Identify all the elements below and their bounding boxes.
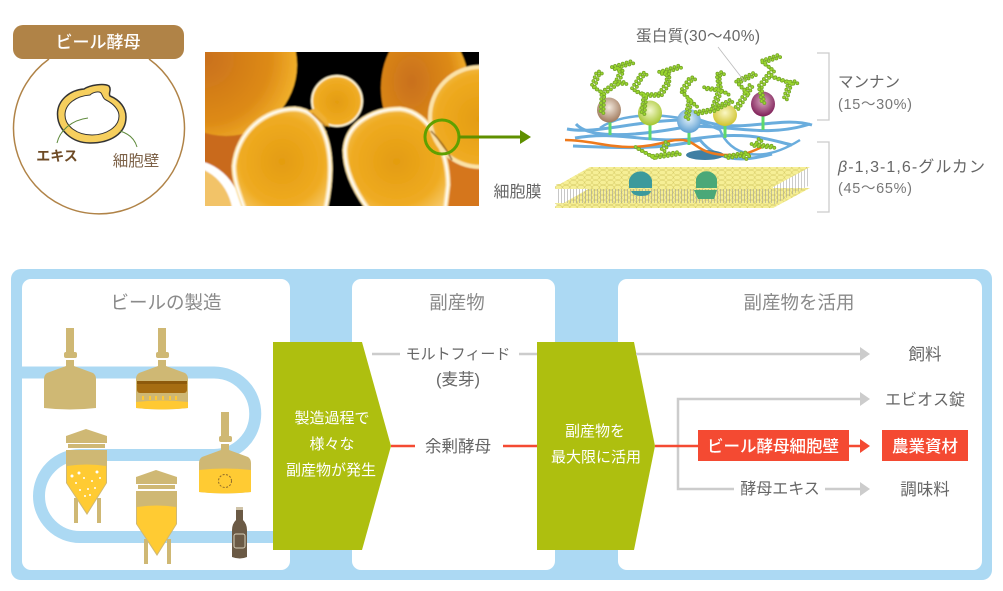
panel: brewing: [22, 279, 290, 570]
protein spheres: [597, 92, 775, 133]
label: エキス: エキス: [36, 148, 78, 164]
red box: 農業資材: [882, 430, 968, 461]
icon: kettle 3: [199, 412, 251, 494]
green arrow block 2: 副産物を: [565, 423, 625, 440]
protein sticks: [610, 115, 763, 145]
leader lines: [57, 118, 137, 147]
label: 調味料: 調味料: [900, 480, 950, 499]
label: モルトフィード (麦芽): (麦芽): [436, 370, 480, 389]
red box: 農業資材: 農業資材: [892, 437, 958, 456]
label: 細胞壁: 細胞壁: [113, 152, 159, 170]
label: glucan: [837, 158, 985, 197]
green arrow block 1: [273, 342, 391, 550]
green arrow block 1: 様々な: [309, 436, 355, 453]
orange strand and oval: [565, 140, 762, 160]
bracket: glucan: [817, 142, 829, 212]
brown badge: ビール酵母: [13, 25, 184, 59]
label: モルトフィード (麦芽): [406, 346, 510, 389]
label: glucan: (45～65%): [838, 181, 912, 197]
green arrow block 2: [537, 342, 655, 550]
label: 飼料: 飼料: [908, 345, 942, 364]
red box: ビール酵母細胞壁: [698, 430, 849, 461]
label: glucan: β-1,3-1,6-グルカン: [837, 158, 985, 176]
red box: ビール酵母細胞壁: ビール酵母細胞壁: [707, 437, 839, 456]
red line: surplus yeast: [391, 445, 540, 447]
panel: utilization: [618, 279, 982, 570]
icon: beer bottle: [232, 507, 247, 558]
mannan chains: [592, 54, 799, 162]
cell wall diagram: [493, 27, 812, 208]
icon: fermenter: [136, 470, 177, 564]
label: mannan: [838, 74, 912, 113]
label: mannan: マンナン: [838, 74, 900, 91]
label: 酵母エキス: 酵母エキス: [740, 480, 820, 498]
lipid membrane: [555, 167, 810, 208]
arrow: to seasoning: [825, 482, 870, 496]
red arrow: [849, 439, 870, 453]
label: 細胞膜: 細胞膜: [493, 183, 542, 201]
yeast cell circle diagram: [14, 59, 184, 214]
icon: kettle 1: [44, 328, 96, 410]
green magnifier circle and arrow: [425, 120, 531, 154]
heading: 副産物を活用: 副産物を活用: [743, 292, 855, 313]
heading: ビールの製造: ビールの製造: [110, 292, 222, 313]
membrane proteins: [629, 171, 717, 199]
icon: fermenter with bubbles: [66, 429, 107, 523]
panel: by-products: [352, 279, 555, 570]
label: 蛋白質: 蛋白質(30～40%): [636, 27, 760, 45]
icon: yeast cell ring: [58, 85, 126, 143]
cell interior: [65, 92, 119, 135]
icon: kettle 2: [136, 328, 188, 410]
arrow: to Ebios: [678, 392, 870, 489]
green arrow block 1: 副産物が発生: [286, 462, 376, 479]
arrow: to feed: [636, 347, 870, 361]
green arrow block 2: 最大限に活用: [551, 449, 641, 466]
protein leader line: [718, 47, 745, 82]
brewing pipe: [22, 372, 275, 537]
red line to box: [655, 445, 700, 447]
glucan strands: [567, 115, 812, 159]
heading: 副産物: 副産物: [429, 292, 485, 313]
grey line: malt feed: [372, 353, 540, 355]
label: エビオス錠: エビオス錠: [885, 391, 965, 409]
blue background panel: [11, 269, 992, 580]
bracket: mannan: [817, 53, 829, 120]
brown badge: ビール酵母: ビール酵母: [56, 33, 140, 52]
label: 余剰酵母: 余剰酵母: [425, 437, 491, 456]
green arrow block 1: 製造過程で: [294, 410, 370, 427]
label: mannan: (15～30%): [838, 97, 912, 113]
label: モルトフィード (麦芽): モルトフィード: [406, 346, 510, 363]
yeast micrograph photo: [205, 52, 479, 206]
